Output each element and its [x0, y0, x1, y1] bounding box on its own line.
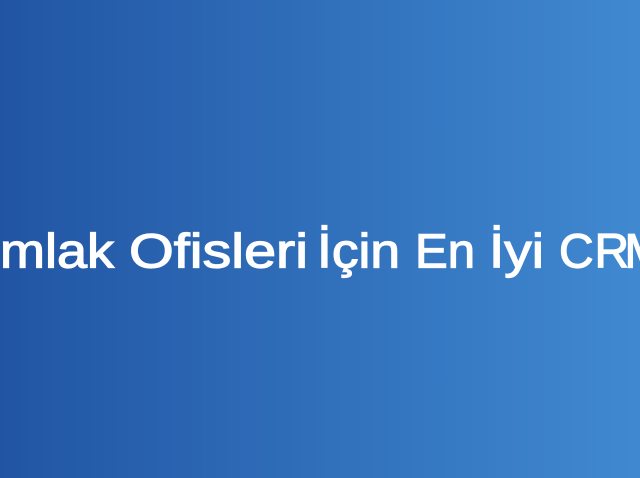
title: İçin [317, 226, 400, 278]
title: Ofisleri [129, 226, 308, 278]
title: En [415, 226, 475, 278]
title: İyi [489, 226, 544, 278]
